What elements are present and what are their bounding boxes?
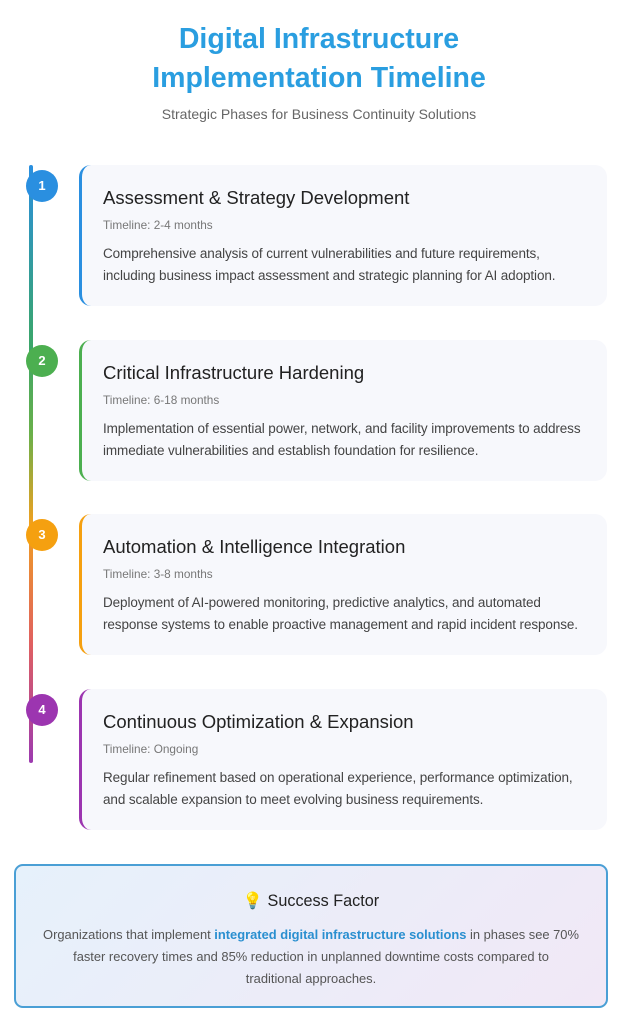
- callout: success factor: faster recovery times and 85% reduction in unplanned downtime costs compared to: [73, 949, 549, 964]
- panel: phase 2: [79, 340, 607, 481]
- subtitle: Strategic Phases for Business Continuity Solutions: [162, 106, 476, 122]
- panel: phase 2: Timeline: 6-18 months: [103, 393, 219, 407]
- callout: success factor: [14, 864, 608, 1008]
- panel: phase 4: Timeline: Ongoing: [103, 742, 198, 756]
- marker 2: [26, 345, 58, 377]
- panel: phase 2: Critical Infrastructure Hardening: [103, 362, 364, 383]
- marker 2: 2: [38, 353, 46, 368]
- panel: phase 4: Continuous Optimization & Expansion: [103, 711, 414, 732]
- callout: success factor: 💡 Success Factor: [243, 892, 379, 910]
- panel: phase 1: [79, 165, 607, 306]
- panel: phase 4: and scalable expansion to meet evolving business requirements.: [103, 792, 483, 807]
- panel: phase 3: Deployment of AI-powered monitoring, predictive analytics, and automated: [103, 595, 541, 610]
- title: Implementation Timeline: [152, 62, 486, 94]
- callout: success factor: Organizations that implement integrated digital infrastructure solutions in phases see 70%: [43, 927, 579, 942]
- marker 4: [26, 694, 58, 726]
- timeline line: [29, 165, 33, 763]
- marker 1: [26, 170, 58, 202]
- panel: phase 4: [79, 689, 607, 830]
- panel: phase 1: including business impact assessment and strategic planning for AI adoption.: [103, 268, 555, 283]
- panel: phase 3: [79, 514, 607, 655]
- panel: phase 3: Automation & Intelligence Integration: [103, 536, 405, 557]
- panel: phase 4: Regular refinement based on operational experience, performance optimization,: [103, 770, 573, 785]
- marker 1: 1: [38, 178, 46, 193]
- marker 3: 3: [38, 527, 46, 542]
- panel: phase 1: Timeline: 2-4 months: [103, 218, 213, 232]
- title: Digital Infrastructure: [179, 23, 459, 55]
- marker 4: 4: [38, 702, 46, 717]
- callout: success factor: traditional approaches.: [246, 971, 376, 986]
- panel: phase 1: Assessment & Strategy Development: [103, 187, 409, 208]
- panel: phase 3: Timeline: 3-8 months: [103, 567, 213, 581]
- title: [152, 23, 486, 94]
- panel: phase 3: response systems to enable proactive management and rapid incident response.: [103, 617, 578, 632]
- panel: phase 1: Comprehensive analysis of current vulnerabilities and future requirements,: [103, 246, 540, 261]
- panel: phase 2: Implementation of essential power, network, and facility improvements to address: [103, 421, 580, 436]
- panel: phase 2: immediate vulnerabilities and establish foundation for resilience.: [103, 443, 478, 458]
- marker 3: [26, 519, 58, 551]
